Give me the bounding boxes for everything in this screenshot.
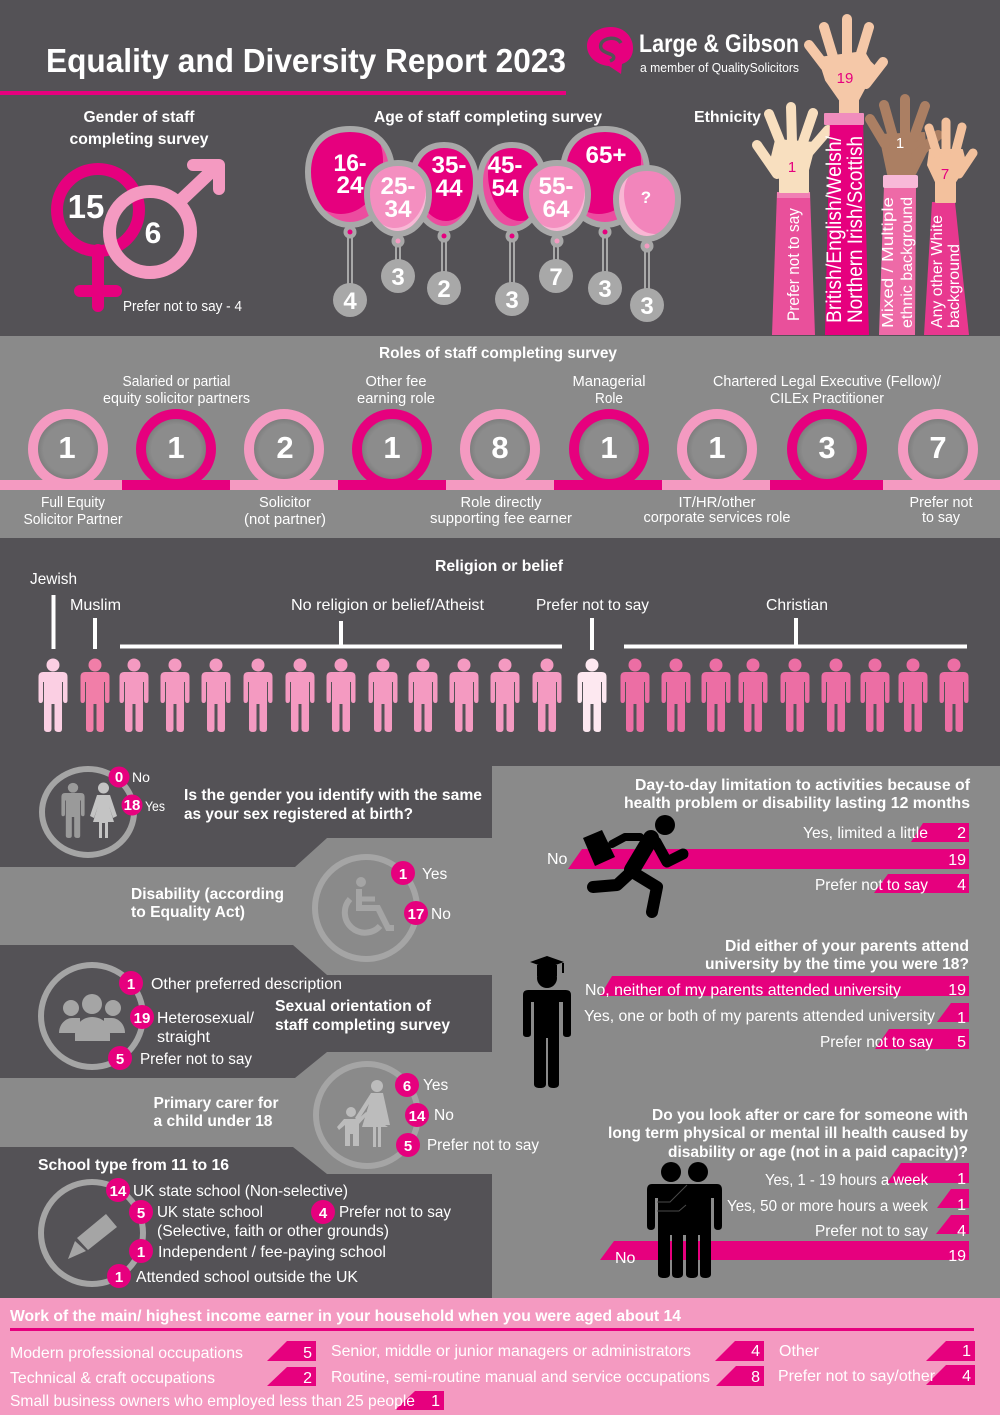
logo: Large & Gibson: Large & Gibson: [639, 30, 799, 58]
bar labels: Prefer not to say: [815, 1223, 928, 1240]
bar labels: Yes, limited a little: [803, 825, 928, 842]
count independent: 1: [137, 1244, 145, 1261]
occupation values: 4: [751, 1343, 760, 1360]
roles top labels: [103, 373, 942, 407]
arm: British/English/Welsh/Northern Irish/Scottish: Northern Irish/Scottish: [844, 136, 867, 323]
panel: religion: [30, 558, 968, 732]
option labels: Heterosexual/: [157, 1010, 255, 1027]
age count numbers: 3: [640, 293, 654, 320]
panel: primary carer: [154, 1064, 539, 1166]
count outside UK: 1: [115, 1269, 123, 1286]
bar labels: [615, 1172, 929, 1267]
panel: sexual orientation: [41, 965, 450, 1070]
roles top labels: earning role: [357, 390, 435, 407]
count yes: [391, 861, 415, 885]
count other: [119, 971, 143, 995]
heading: [131, 886, 284, 921]
occupation labels: [10, 1343, 936, 1410]
balloon 55-64: [523, 157, 588, 248]
ethnicity heading: Ethnicity: [694, 109, 761, 126]
bar labels: No, neither of my parents attended university: [585, 982, 901, 999]
gender heading line 2: completing survey: [70, 131, 209, 148]
heading: Sexual orientation of: [275, 998, 432, 1015]
religion brackets: [54, 595, 967, 650]
arm: any other White background: background: [946, 244, 963, 328]
bar values: [948, 982, 966, 1051]
bar values: 2: [957, 825, 966, 842]
religion labels: No religion or belief/Atheist: [291, 597, 485, 614]
value tabs: [267, 1341, 975, 1410]
icon: pencil in circle: [41, 1182, 143, 1284]
roles top labels: Chartered Legal Executive (Fellow)/: [713, 373, 942, 390]
count selective: 5: [137, 1205, 145, 1222]
count outside UK: [107, 1264, 131, 1288]
role numbers: 1: [58, 430, 76, 465]
age count numbers: 3: [598, 276, 612, 303]
heading: a child under 18: [154, 1113, 273, 1130]
pictogram: Christian: [620, 658, 968, 732]
pictogram: prefer not to say: [578, 658, 606, 732]
icon: parent and child in circle: [316, 1064, 418, 1166]
panel: parents attended university: [523, 938, 969, 1088]
option labels: No: [434, 1107, 454, 1124]
male count: 6: [145, 217, 161, 250]
bar values: [948, 825, 966, 894]
grey zigzag background: [0, 766, 1000, 1298]
panel: school type: [38, 1157, 451, 1288]
bar values: 4: [957, 877, 966, 894]
arm: British/English/Welsh/Northern Irish/Scottish: 19: [837, 70, 853, 87]
roles top labels: Managerial: [572, 373, 646, 390]
age labels: 34: [384, 196, 412, 223]
age count numbers: 3: [391, 264, 405, 291]
bars: [568, 823, 969, 893]
count no: [405, 1103, 429, 1127]
roles top labels: Salaried or partial: [122, 373, 230, 390]
roles bottom labels: Full Equity: [41, 494, 105, 511]
roles bottom labels: corporate services role: [644, 509, 790, 526]
count prefer not to say: [311, 1200, 335, 1224]
role numbers: 7: [929, 430, 947, 465]
occupation values: 1: [431, 1393, 440, 1410]
strings: [348, 232, 649, 292]
count heterosexual: [130, 1005, 154, 1029]
bars: [600, 976, 969, 1049]
balloon 25-34: [364, 157, 429, 248]
occupation labels: Senior, middle or junior managers or administrators: [331, 1343, 691, 1360]
arm: prefer not to say: [757, 107, 828, 335]
age count numbers: 2: [437, 276, 451, 303]
age labels: 65+: [586, 142, 626, 169]
bar values: 1: [957, 1171, 966, 1188]
panel: ethnicity: [694, 19, 973, 335]
icon: male symbol: [110, 165, 219, 272]
count independent: [129, 1239, 153, 1263]
arm: British/English/Welsh/Northern Irish/Scottish: [809, 19, 883, 335]
pictogram: Muslim: [80, 658, 110, 732]
arm: mixed / multiple ethnic background: Mixed / Multiple: [880, 197, 897, 328]
bar labels: [547, 825, 928, 894]
option labels: (Selective, faith or other grounds): [157, 1223, 389, 1240]
roles top labels: CILEx Practitioner: [770, 390, 884, 407]
age labels: 45-: [488, 152, 523, 179]
roles bottom labels: Solicitor: [259, 494, 311, 511]
occupation labels: Other: [779, 1343, 820, 1360]
option labels: [423, 1077, 539, 1154]
icon: two people: [647, 1162, 722, 1278]
age labels: 25-: [380, 173, 416, 200]
age labels: 24: [336, 172, 364, 199]
option labels: UK state school (Non-selective): [133, 1183, 348, 1200]
roles bottom labels: Prefer not: [910, 494, 973, 511]
roles bottom labels: Role directly: [460, 494, 542, 511]
heading: university by the time you were 18?: [705, 956, 969, 973]
role numbers: 3: [818, 430, 836, 465]
bar labels: Prefer not to say: [815, 877, 928, 894]
age labels: 55-: [538, 173, 574, 200]
age count numbers: 7: [549, 264, 563, 291]
occupation values: 2: [303, 1370, 312, 1387]
count selective: [129, 1200, 153, 1224]
arm: any other White background: 7: [941, 166, 949, 183]
occupation values: [303, 1343, 971, 1410]
option labels: [422, 866, 451, 923]
logo: Large & Gibson: a member of QualitySolicitors: [640, 61, 799, 75]
role numbers: 1: [383, 430, 401, 465]
option labels: [140, 976, 342, 1068]
age counts: [333, 259, 664, 322]
roles heading: Roles of staff completing survey: [379, 345, 617, 362]
pictogram: no religion: [120, 658, 562, 732]
roles stripe: [0, 480, 1000, 490]
age labels: 16-: [334, 150, 367, 177]
bar labels: No: [615, 1250, 636, 1267]
logo: Large & Gibson: [587, 27, 799, 75]
icon: running person with briefcase: [583, 815, 683, 912]
religion heading: Religion or belief: [435, 558, 564, 575]
bar labels: Yes, 50 or more hours a week: [727, 1198, 929, 1215]
bar labels: Yes, one or both of my parents attended university: [584, 1008, 935, 1025]
count heterosexual: 19: [134, 1010, 150, 1027]
heading: disability or age (not in a paid capacity)?: [668, 1144, 968, 1161]
title: [0, 42, 566, 95]
bars: [600, 1163, 969, 1260]
age count numbers: [343, 264, 654, 320]
heading: [608, 1107, 968, 1161]
religion labels: [30, 571, 828, 614]
panel: age balloons: [299, 109, 686, 322]
roles top labels: Other fee: [366, 373, 426, 390]
count prefer not to say: 5: [404, 1138, 412, 1155]
roles bottom labels: IT/HR/other: [678, 494, 756, 511]
arm: any other White background: Any other White: [929, 215, 946, 328]
role numbers: [58, 430, 947, 465]
option labels: Attended school outside the UK: [136, 1269, 358, 1286]
count no: 14: [409, 1108, 426, 1125]
heading: staff completing survey: [275, 1017, 450, 1034]
option labels: Prefer not to say: [339, 1204, 451, 1221]
count non-selective: 14: [110, 1183, 127, 1200]
option labels: [132, 769, 165, 814]
count no: 17: [408, 906, 424, 923]
roles bottom labels: to say: [922, 509, 960, 526]
count yes: 6: [403, 1078, 411, 1095]
bar values: 19: [948, 982, 966, 999]
occupation values: 8: [751, 1369, 760, 1386]
bar labels: No: [547, 851, 568, 868]
arm: prefer not to say: 1: [788, 159, 796, 176]
age labels: 44: [436, 175, 463, 202]
count prefer not to say: [108, 1046, 132, 1070]
age labels: [334, 142, 651, 223]
role numbers: 1: [708, 430, 726, 465]
panel: caring responsibilities: [600, 1107, 969, 1278]
religion labels: Muslim: [70, 597, 121, 614]
panel: gender: [57, 109, 242, 315]
occupation labels: Modern professional occupations: [10, 1345, 243, 1362]
occupation labels: Small business owners who employed less than 25 people: [10, 1393, 415, 1410]
title: Equality and Diversity Report 2023: [46, 42, 566, 79]
bar values: 5: [957, 1034, 966, 1051]
age heading: Age of staff completing survey: [374, 109, 602, 126]
roles bottom labels: supporting fee earner: [430, 510, 572, 527]
arm: mixed / multiple ethnic background: 1: [896, 135, 904, 152]
roles top labels: equity solicitor partners: [103, 390, 250, 407]
role numbers: 1: [600, 430, 618, 465]
count yes: [395, 1073, 419, 1097]
panel: household income earner: [0, 1298, 1000, 1415]
religion labels: Christian: [766, 597, 828, 614]
option labels: Yes: [423, 1077, 449, 1094]
count yes: 18: [124, 797, 140, 814]
age labels: 54: [492, 175, 519, 202]
heading: Work of the main/ highest income earner in your household when you were aged about 14: [10, 1308, 681, 1325]
count no: [108, 766, 130, 788]
bar values: 1: [957, 1197, 966, 1214]
option labels: Other preferred description: [151, 976, 342, 993]
role numbers: 8: [491, 430, 509, 465]
arm: mixed / multiple ethnic background: ethnic background: [899, 197, 916, 328]
question: [184, 787, 482, 823]
age labels: 64: [542, 196, 570, 223]
heading: [154, 1095, 278, 1130]
roles bottom labels: [24, 494, 973, 528]
count non-selective: [106, 1178, 130, 1202]
female count: 15: [68, 188, 104, 225]
balloon 16-24: [305, 126, 394, 238]
pictogram: Jewish: [38, 658, 68, 732]
question: Is the gender you identify with the same: [184, 787, 482, 804]
option labels: UK state school: [157, 1204, 263, 1221]
bar labels: Yes, 1 - 19 hours a week: [765, 1172, 929, 1189]
option labels: [133, 1183, 451, 1286]
option labels: Prefer not to say: [427, 1137, 539, 1154]
heading: [275, 998, 450, 1034]
role rings: [33, 414, 973, 484]
role numbers: 2: [276, 430, 294, 465]
option labels: Prefer not to say: [140, 1051, 252, 1068]
bar labels: [584, 982, 935, 1051]
arm: British/English/Welsh/Northern Irish/Scottish: British/English/Welsh/: [823, 136, 846, 323]
count other: 1: [127, 976, 135, 993]
count yes: 1: [399, 866, 407, 883]
balloon 35-44: [412, 137, 478, 242]
heading: Primary carer for: [154, 1095, 278, 1112]
bar labels: Prefer not to say: [820, 1034, 933, 1051]
count yes: [122, 794, 142, 816]
count prefer not to say: [396, 1133, 420, 1157]
heading: School type from 11 to 16: [38, 1157, 229, 1174]
heading: health problem or disability lasting 12 months: [624, 795, 970, 812]
occupation values: 4: [962, 1368, 971, 1385]
question: as your sex registered at birth?: [184, 806, 413, 823]
count prefer not to say: 4: [319, 1205, 328, 1222]
roles top labels: Role: [595, 390, 623, 407]
role numbers: 1: [167, 430, 185, 465]
heading: [705, 938, 969, 973]
age count numbers: 4: [343, 288, 357, 315]
heading: to Equality Act): [131, 904, 245, 921]
panel: disability: [131, 857, 451, 959]
roles bottom labels: Solicitor Partner: [24, 511, 122, 528]
occupation labels: Routine, semi-routine manual and service occupations: [331, 1369, 710, 1386]
prefer not to say: Prefer not to say - 4: [123, 298, 242, 315]
icon: graduate: [523, 956, 571, 1088]
count no: 0: [115, 769, 123, 786]
option labels: No: [431, 906, 451, 923]
heading: long term physical or mental ill health caused by: [608, 1125, 968, 1142]
count prefer not to say: 5: [116, 1051, 124, 1068]
heading: [624, 777, 971, 812]
arm: prefer not to say: Prefer not to say: [784, 208, 803, 321]
icon: group in circle: [41, 965, 143, 1067]
option labels: Yes: [145, 798, 165, 814]
panel: gender identity: [42, 766, 482, 855]
occupation labels: Technical & craft occupations: [10, 1370, 215, 1387]
heading: Do you look after or care for someone with: [652, 1107, 968, 1124]
bar values: 4: [957, 1223, 966, 1240]
balloon 65+: [557, 118, 647, 238]
arm: mixed / multiple ethnic background: [870, 99, 938, 335]
icon: wheelchair in circle: [315, 857, 417, 959]
option labels: No: [132, 769, 150, 785]
count no: [404, 901, 428, 925]
heading: Did either of your parents attend: [725, 938, 969, 955]
balloon 45-54: [478, 142, 544, 242]
bar values: 19: [948, 1248, 966, 1265]
occupation values: 5: [303, 1345, 312, 1362]
age count numbers: 3: [505, 287, 519, 314]
age labels: ?: [641, 188, 651, 207]
occupation labels: Prefer not to say/other: [778, 1368, 936, 1385]
heading: Day-to-day limitation to activities because of: [635, 777, 971, 794]
bar values: 1: [957, 1010, 966, 1027]
balloon unknown age: [616, 163, 686, 252]
icon circle with man and woman: [42, 769, 134, 855]
option labels: straight: [157, 1029, 211, 1046]
age labels: 35-: [432, 152, 467, 179]
heading: Disability (according: [131, 886, 284, 903]
roles bottom labels: (not partner): [244, 511, 326, 528]
religion labels: Prefer not to say: [536, 597, 649, 614]
arm: any other White background: [924, 122, 973, 335]
icon: female symbol: [57, 169, 139, 306]
panel: roles: [0, 336, 1000, 538]
occupation values: 1: [962, 1343, 971, 1360]
panel: day-to-day limitation: [547, 777, 971, 912]
bar values: [948, 1171, 966, 1265]
religion labels: Jewish: [30, 571, 77, 588]
option labels: Independent / fee-paying school: [158, 1244, 386, 1261]
gender heading: Gender of staff: [84, 109, 195, 126]
bar values: 19: [948, 852, 966, 869]
option labels: Yes: [422, 866, 448, 883]
